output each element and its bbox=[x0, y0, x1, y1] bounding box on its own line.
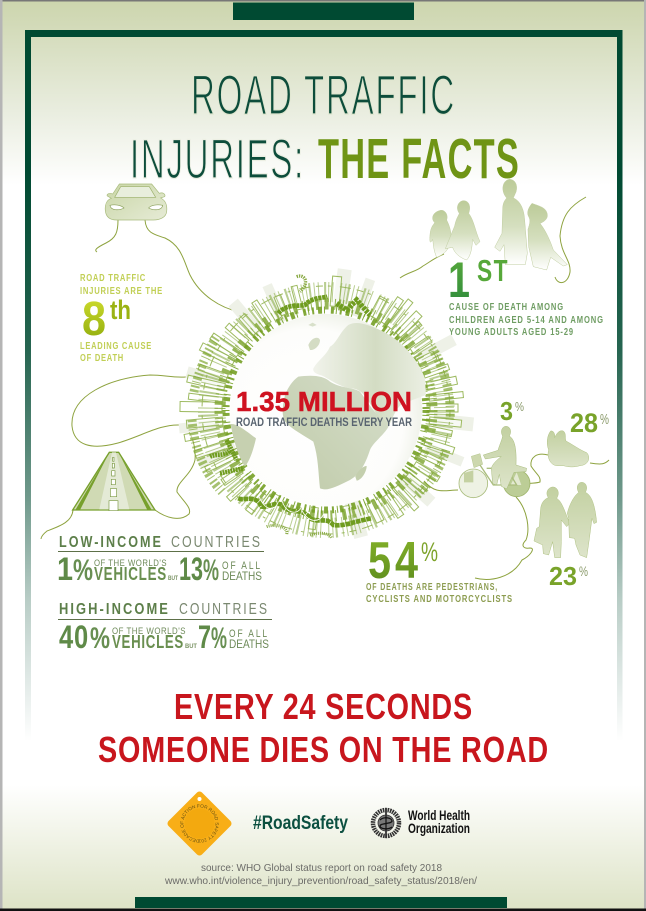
panel: high-income countries: % bbox=[211, 622, 227, 655]
stat: 54%: OF DEATHS ARE PEDESTRIANS, bbox=[366, 582, 498, 593]
panel: low-income countries: OF THE WORLD'S bbox=[94, 558, 167, 569]
title: THE FACTS bbox=[318, 127, 520, 190]
text: 1st cause of death bbox=[448, 252, 604, 338]
panel: high-income countries: DEATHS bbox=[229, 637, 269, 651]
source: source: WHO Global status report on road safety 2018 bbox=[201, 862, 442, 874]
panel: high-income countries: VEHICLES bbox=[112, 631, 184, 652]
stat: 3%: 3 bbox=[500, 396, 513, 426]
icon: road bbox=[73, 452, 155, 511]
panel: low-income countries bbox=[57, 534, 264, 587]
stat: 3% bbox=[500, 396, 524, 426]
continents bbox=[231, 323, 426, 489]
globe sphere bbox=[230, 314, 422, 506]
stat: 54%: % bbox=[421, 537, 438, 567]
connector lines bbox=[41, 197, 609, 579]
source bbox=[164, 862, 477, 887]
icon: motorcyclists bbox=[547, 431, 589, 467]
ghost skyline bbox=[179, 268, 474, 539]
text: 8th leading cause: LEADING CAUSE bbox=[80, 341, 152, 352]
top tab bbox=[233, 2, 414, 20]
stat: 3%: % bbox=[515, 399, 524, 414]
panel: low-income countries: LOW-INCOME bbox=[59, 534, 163, 551]
logo: World Health Organization: World Health bbox=[408, 808, 470, 823]
stat: 54% bbox=[366, 532, 513, 605]
panel: low-income countries: 1 bbox=[57, 551, 73, 587]
title bbox=[130, 63, 520, 190]
stat: 28%: 28 bbox=[570, 408, 598, 438]
text: 1st cause of death: CAUSE OF DEATH AMONG bbox=[449, 302, 564, 313]
panel: low-income countries: % bbox=[73, 554, 93, 587]
panel: high-income countries: BUT bbox=[185, 643, 197, 650]
text: 1st cause of death: 1 bbox=[448, 252, 470, 308]
icon: cyclist bbox=[459, 426, 530, 498]
panel: high-income countries: HIGH-INCOME bbox=[59, 601, 170, 618]
panel: low-income countries: DEATHS bbox=[222, 569, 262, 583]
panel: low-income countries: % bbox=[203, 554, 219, 587]
text: 8th leading cause: INJURIES ARE THE bbox=[80, 286, 163, 297]
text: 8th leading cause: th bbox=[110, 295, 131, 325]
source: www.who.int/violence_injury_prevention/road_safety_status/2018/en/ bbox=[164, 875, 477, 887]
city ring detail bbox=[192, 286, 450, 534]
text: 1st cause of death: ST bbox=[477, 253, 509, 288]
stat: 54%: 54 bbox=[368, 532, 422, 590]
icon: pedestrians bbox=[534, 482, 597, 558]
headline number: 1.35 MILLION bbox=[236, 386, 412, 417]
panel: high-income countries: OF THE WORLD'S bbox=[112, 626, 186, 637]
globe with city ring bbox=[179, 268, 474, 539]
logo: World Health Organization bbox=[373, 808, 470, 838]
frame bbox=[25, 30, 622, 741]
text: 8th leading cause: 8 bbox=[82, 293, 106, 346]
panel: low-income countries: VEHICLES bbox=[94, 563, 167, 584]
title: INJURIES: bbox=[130, 127, 305, 190]
stat: 54%: CYCLISTS AND MOTORCYCLISTS bbox=[366, 594, 513, 605]
panel: high-income countries bbox=[58, 601, 272, 655]
icon: car bbox=[105, 184, 167, 220]
hashtag: #RoadSafety bbox=[253, 812, 348, 834]
text: 8th leading cause: ROAD TRAFFIC bbox=[80, 273, 146, 284]
bottom tab bbox=[135, 897, 507, 908]
title: ROAD TRAFFIC bbox=[191, 63, 456, 126]
callout: every 24 seconds: EVERY 24 SECONDS bbox=[174, 686, 473, 727]
panel: high-income countries: OF ALL bbox=[229, 628, 269, 640]
panel: low-income countries: COUNTRIES bbox=[171, 534, 262, 551]
text: 8th leading cause bbox=[80, 273, 163, 364]
stat: 23%: 23 bbox=[549, 561, 577, 591]
stat: 23%: % bbox=[579, 563, 588, 579]
callout: every 24 seconds bbox=[98, 686, 549, 770]
stat: 28%: % bbox=[600, 411, 609, 428]
headline number: ROAD TRAFFIC DEATHS EVERY YEAR bbox=[236, 415, 412, 429]
panel: low-income countries: 13 bbox=[179, 551, 203, 587]
bridges and trees bbox=[210, 276, 372, 538]
panel: high-income countries: % bbox=[90, 622, 110, 655]
logo: decade of action bbox=[168, 792, 232, 856]
logo: decade of action: DECADE OF ACTION FOR ROAD SAFETY 2011-2020 bbox=[180, 804, 219, 843]
panel: high-income countries: 7 bbox=[198, 619, 211, 655]
logo: World Health Organization: Organization bbox=[408, 821, 470, 836]
panel: low-income countries: BUT bbox=[168, 575, 178, 582]
outlined buildings bbox=[180, 276, 463, 530]
text: 1st cause of death: YOUNG ADULTS AGED 15-29 bbox=[449, 327, 574, 338]
panel: low-income countries: OF ALL bbox=[222, 560, 262, 572]
text: 8th leading cause: OF DEATH bbox=[80, 353, 124, 364]
icon: family silhouettes bbox=[430, 179, 567, 270]
panel: high-income countries: 40 bbox=[59, 619, 89, 655]
panel: high-income countries: COUNTRIES bbox=[179, 601, 269, 618]
